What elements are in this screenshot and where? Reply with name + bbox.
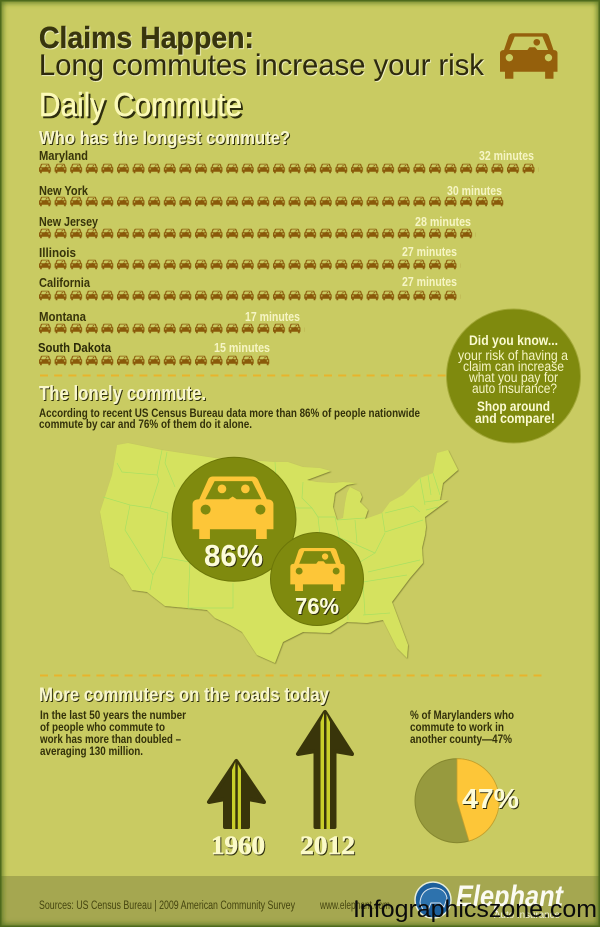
heading: The lonely commute: The lonely commute. xyxy=(39,383,206,405)
row: New York: New York xyxy=(39,184,88,198)
text: lonely commute paragraph xyxy=(39,408,420,431)
heading: More commuters on the roads today: More commuters on the roads today xyxy=(39,685,329,706)
text: commuters paragraph: In the last 50 years the number xyxy=(40,710,186,722)
text: Marylanders: % of Marylanders who xyxy=(410,710,514,722)
logo: Elephant: Elephant xyxy=(456,880,565,913)
row: South Dakota: 15 minutes xyxy=(214,341,270,355)
callout: Did you know: and compare! xyxy=(475,410,555,426)
logo: Elephant xyxy=(415,880,565,921)
callout: Did you know: claim can increase xyxy=(463,359,564,374)
callout: Did you know: Shop around xyxy=(477,398,550,414)
title xyxy=(39,20,485,82)
label: 1960: 1960 xyxy=(211,831,265,860)
row: New York: 30 minutes xyxy=(447,184,502,198)
row: New Jersey xyxy=(39,215,476,239)
pie chart: 47 percent xyxy=(415,759,519,843)
text: commuters paragraph xyxy=(39,710,186,758)
row: Illinois xyxy=(39,245,460,270)
row: Illinois: Illinois xyxy=(39,246,76,260)
text: commuters paragraph: averaging 130 million. xyxy=(40,746,143,758)
callout: Did you know: your risk of having a xyxy=(458,348,568,363)
callout: Did you know: what you pay for xyxy=(468,370,558,385)
arrow: 1960 xyxy=(209,761,264,829)
text: Marylanders xyxy=(410,710,514,746)
text: Marylanders: another county—47% xyxy=(410,734,512,746)
icon: car with one person xyxy=(290,548,345,591)
text: lonely commute paragraph: According to recent US Census Bureau data more than 86% of people nationwide xyxy=(39,408,420,420)
icon: car with two people xyxy=(193,476,273,539)
watermark: Infographicszone.com xyxy=(353,896,597,923)
row: Maryland: Maryland xyxy=(39,149,88,163)
callout: Did you know: auto insurance? xyxy=(472,381,557,396)
value: 47%: 47% xyxy=(462,783,519,814)
text: commuters paragraph: work has more than doubled – xyxy=(39,734,182,746)
text: lonely commute paragraph: commute by car and 76% of them do it alone. xyxy=(39,419,252,431)
text: commuters paragraph: of people who commute to xyxy=(40,722,165,734)
footer xyxy=(39,880,565,921)
circle: 76 percent xyxy=(270,532,364,626)
row: New Jersey: New Jersey xyxy=(39,215,98,229)
value: 86%: 86% xyxy=(204,538,263,573)
row: New Jersey: 28 minutes xyxy=(415,215,471,229)
row: South Dakota xyxy=(38,341,273,366)
map: United States xyxy=(100,443,458,663)
row: Illinois: 27 minutes xyxy=(402,245,457,259)
website: www.elephant.com xyxy=(319,900,390,912)
title line one: Claims Happen: xyxy=(39,20,254,55)
row: South Dakota: South Dakota xyxy=(38,341,112,355)
row: California xyxy=(39,275,460,301)
heading: Daily Commute: Daily Commute xyxy=(39,86,242,123)
arrow: 2012 xyxy=(298,712,352,829)
text: Marylanders: commute to work in xyxy=(410,722,504,734)
row: New York xyxy=(39,184,507,207)
icon: brown car xyxy=(500,33,558,79)
row: California: 27 minutes xyxy=(402,275,457,289)
heading: Who has the longest commute?: Who has the longest commute? xyxy=(39,128,290,148)
sources: Sources: US Census Bureau | 2009 American Community Survey xyxy=(39,900,295,912)
label: 2012: 2012 xyxy=(300,831,355,860)
logo: Elephant: Auto Insurance xyxy=(494,910,560,921)
row: Montana: 17 minutes xyxy=(245,310,300,324)
row: California: California xyxy=(39,276,91,290)
row: Montana xyxy=(39,310,304,334)
callout: Did you know: Did you know... xyxy=(469,332,558,348)
callout: Did you know xyxy=(446,309,580,443)
row: Maryland: 32 minutes xyxy=(479,149,534,163)
circle: 86 percent xyxy=(172,457,296,581)
row: Montana: Montana xyxy=(39,310,87,324)
title line two: Long commutes increase your risk xyxy=(39,49,485,82)
row: Maryland xyxy=(39,149,538,174)
value: 76%: 76% xyxy=(295,593,339,619)
